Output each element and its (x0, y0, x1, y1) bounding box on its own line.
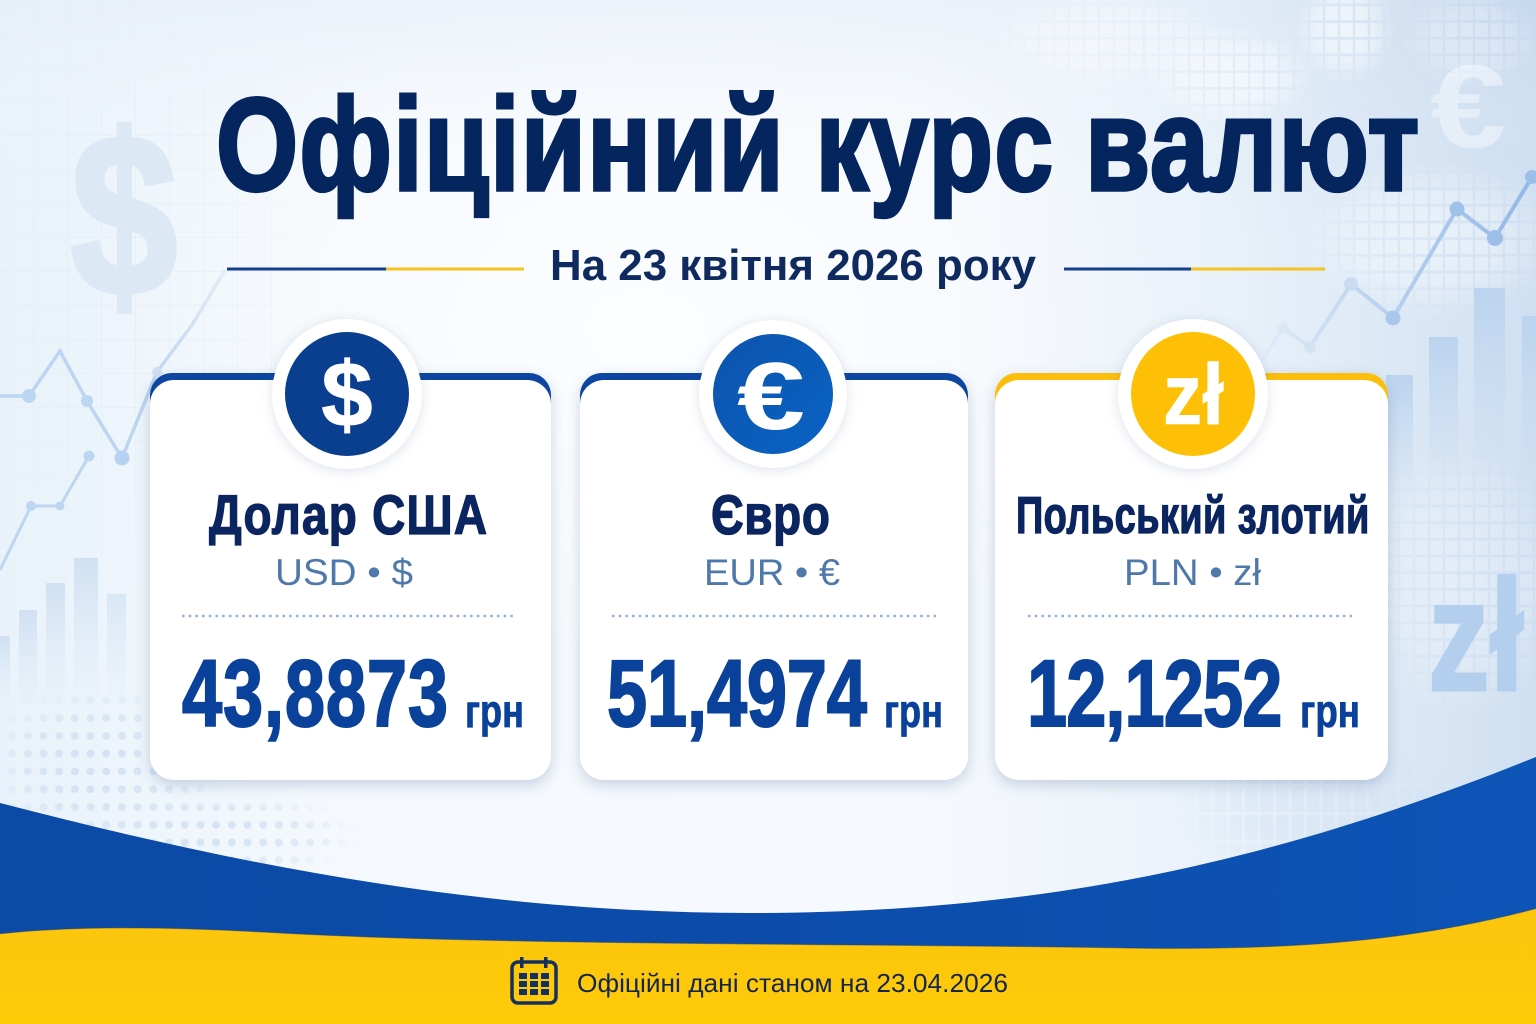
chart: right trend line (1262, 170, 1536, 360)
wave: yellow band (0, 908, 1536, 1024)
rate: USD: 43,8873 (182, 640, 448, 746)
icon: euro coin (699, 320, 847, 468)
currency code: EUR: EUR • € (704, 552, 840, 593)
icon: euro coin: € (737, 343, 805, 450)
footer note (512, 957, 1008, 1003)
panel: EUR card (580, 320, 968, 780)
rate: PLN: грн (1300, 685, 1360, 737)
currency code: PLN: PLN • zł (1124, 552, 1261, 593)
rate: EUR: 51,4974 (607, 640, 867, 746)
watermark: dollar sign: $ (71, 89, 177, 343)
icon: dollar coin (272, 319, 422, 469)
chart: left bars (0, 558, 126, 710)
currency name: USD: Долар США (209, 484, 487, 546)
watermark: euro sign: € (1430, 41, 1506, 173)
title: Офіційний курс валют (216, 72, 1419, 219)
panel: PLN card (995, 319, 1388, 780)
subtitle with date (227, 241, 1325, 290)
icon: dollar coin: $ (321, 344, 373, 446)
rate: EUR: грн (884, 685, 943, 737)
chart: left trend lines (0, 270, 225, 570)
icon: calendar (512, 957, 556, 1003)
wave: blue band (0, 757, 1536, 1024)
currency name: EUR: Євро (711, 484, 830, 546)
rate: PLN: 12,1252 (1027, 640, 1282, 746)
currency code: USD: USD • $ (275, 552, 413, 593)
panel: USD card (150, 319, 551, 780)
rate: USD: грн (465, 685, 524, 737)
footer text: Офіційні дані станом на 23.04.2026 (577, 968, 1008, 998)
subtitle with date: На 23 квітня 2026 року (550, 241, 1037, 290)
chart: right bars (1386, 288, 1536, 500)
currency name: PLN: Польський злотий (1016, 486, 1369, 544)
icon: zloty coin (1118, 319, 1268, 469)
icon: zloty coin: zł (1163, 347, 1224, 443)
